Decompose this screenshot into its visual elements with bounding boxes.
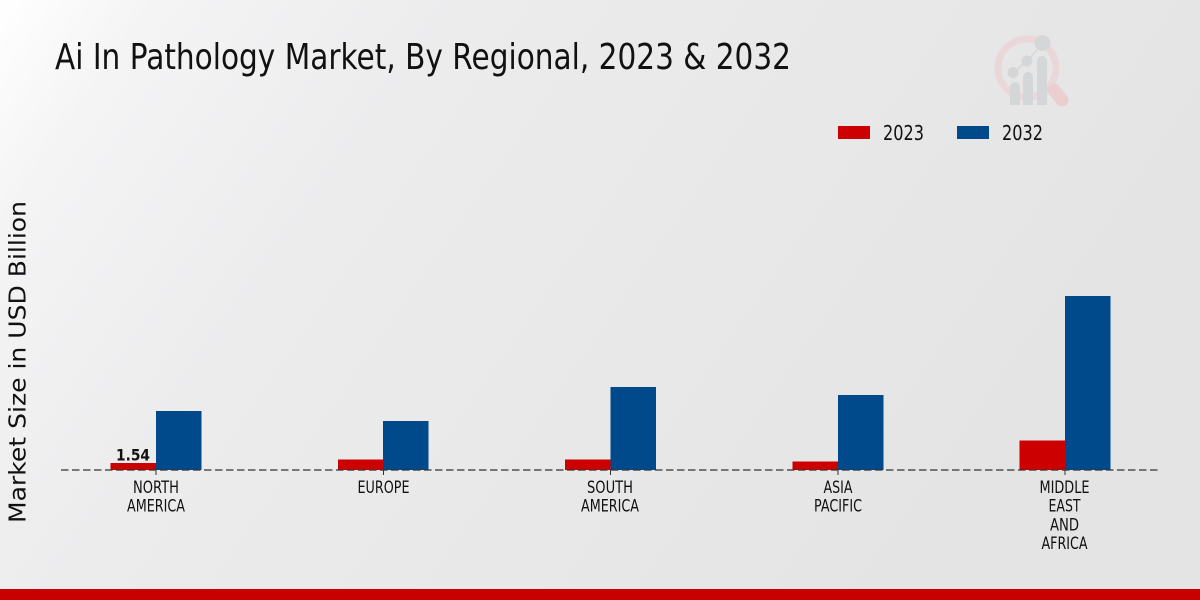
group: Asia Pacific: PACIFIC <box>814 496 862 516</box>
y axis label: Market Size in USD Billion <box>4 201 32 523</box>
legend item: 2032: 2032 <box>1002 121 1043 145</box>
group: Middle East and Africa <box>1020 296 1110 553</box>
legend <box>838 121 1043 145</box>
group: North America <box>110 411 202 516</box>
group: Asia Pacific: ASIA <box>824 478 853 497</box>
x axis baseline <box>61 470 1160 475</box>
footer bar <box>0 589 1200 600</box>
group: Middle East and Africa: AFRICA <box>1042 534 1088 553</box>
group: North America: NORTH <box>133 478 179 497</box>
group: South America: SOUTH <box>587 478 633 497</box>
legend item: 2032 <box>957 121 1043 145</box>
group: Middle East and Africa: EAST <box>1048 496 1081 516</box>
group: South America <box>565 387 656 516</box>
group: North America: AMERICA <box>127 496 186 516</box>
group: Europe: EUROPE <box>358 478 410 497</box>
watermark logo <box>998 35 1062 105</box>
group: South America: AMERICA <box>581 496 640 516</box>
group: Middle East and Africa: MIDDLE <box>1040 478 1090 497</box>
group: Europe <box>338 421 428 497</box>
group: Middle East and Africa: AND <box>1050 516 1079 534</box>
legend item: 2023: 2023 <box>883 121 924 145</box>
group: North America: 1.54 <box>116 446 150 464</box>
bar chart <box>110 296 1110 553</box>
legend item: 2023 <box>838 121 924 145</box>
group: Asia Pacific <box>792 395 884 516</box>
title: Ai In Pathology Market, By Regional, 2023 & 2032 <box>55 37 791 78</box>
